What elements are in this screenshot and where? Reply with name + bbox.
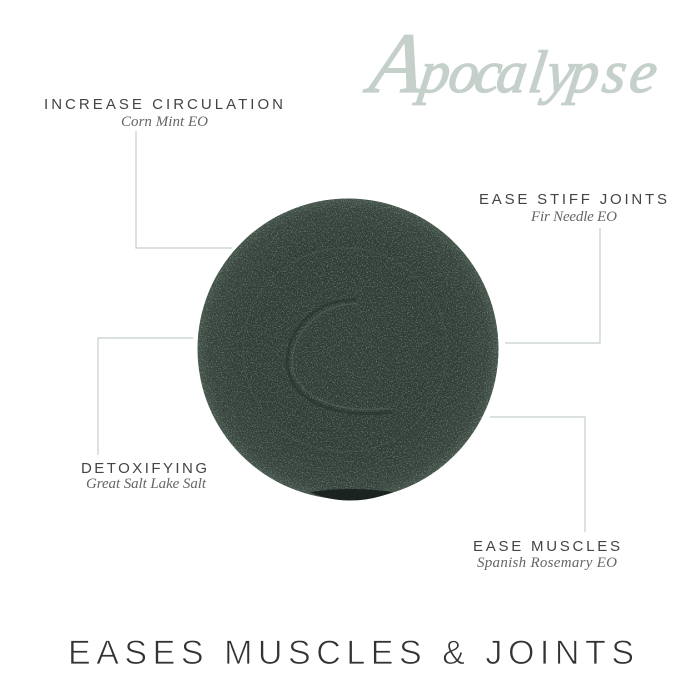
callout: detoxifying: Great Salt Lake Salt — [86, 476, 207, 492]
title: Apocalypse: pocalypse — [412, 39, 662, 106]
connector: increase circulation — [136, 131, 232, 248]
callout: ease muscles: EASE MUSCLES — [473, 538, 620, 555]
callout: detoxifying: DETOXIFYING — [81, 460, 207, 477]
tagline: EASES MUSCLES & JOINTS — [68, 634, 634, 672]
callout: ease muscles: Spanish Rosemary EO — [477, 555, 617, 571]
title: Apocalypse — [360, 15, 665, 111]
callout: ease muscles — [473, 538, 620, 571]
base shadow — [310, 489, 393, 500]
callout: ease stiff joints: Fir Needle EO — [530, 209, 617, 225]
callout: ease stiff joints: EASE STIFF JOINTS — [479, 191, 667, 208]
title: Apocalypse: A — [365, 15, 431, 111]
callout: ease stiff joints — [479, 191, 667, 225]
embossed logo — [243, 248, 447, 452]
callout: increase circulation — [44, 96, 283, 130]
callout: detoxifying — [81, 460, 207, 492]
connector: ease muscles — [490, 417, 585, 532]
connector: ease stiff joints — [505, 228, 600, 343]
connector: detoxifying — [98, 338, 193, 455]
callout: increase circulation: INCREASE CIRCULATION — [44, 96, 283, 113]
callout: increase circulation: Corn Mint EO — [121, 114, 208, 130]
bath bomb — [197, 198, 499, 500]
